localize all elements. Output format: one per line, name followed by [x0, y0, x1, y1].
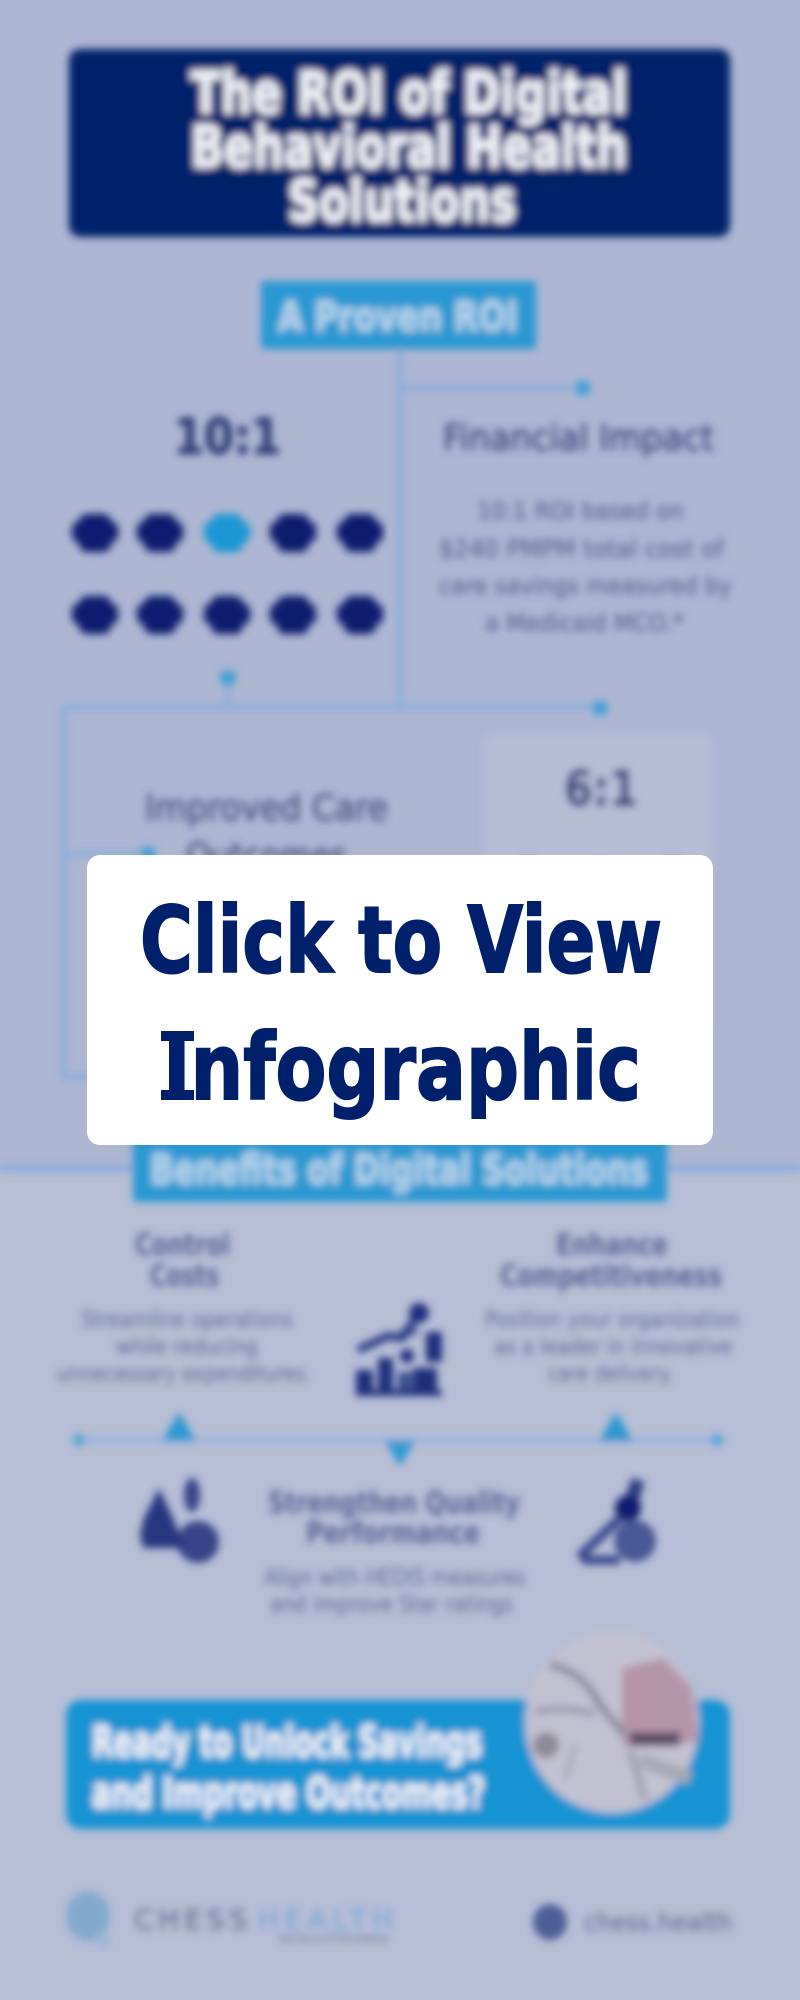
benefit: Enhance Competitiveness: [485, 1228, 740, 1387]
text: financial impact description: [439, 497, 732, 637]
benefit: Enhance Competitiveness: care delivery.: [548, 1362, 673, 1387]
section heading: A Proven ROI: A Proven ROI: [278, 292, 518, 341]
icon: competitive edge: [582, 1480, 656, 1562]
heading: Improved Care Outcomes: Outcomes: [186, 836, 347, 877]
text: quality description: [264, 1565, 525, 1618]
title banner: [69, 49, 730, 237]
background: upper section: [0, 0, 800, 1170]
benefit: Control Costs: [57, 1228, 311, 1387]
call to action banner: Ready to Unlock Savings: [92, 1717, 482, 1768]
logo: Chess Health: HEALTH: [258, 1903, 393, 1936]
icon: rising bar chart: [356, 1303, 442, 1396]
section heading: A Proven ROI: [261, 281, 536, 349]
benefit: Enhance Competitiveness: Competitiveness: [500, 1259, 722, 1294]
logo: Chess Health: SOLUTIONS: [278, 1934, 388, 1945]
title banner: The ROI of Digital: [191, 59, 627, 127]
benefit: Enhance Competitiveness: as a leader in innovative: [494, 1335, 732, 1360]
icon: coins and drop (cost control): [140, 1478, 219, 1563]
piggy bank pictogram: 10 of 10: [72, 514, 383, 634]
heading: Strengthen Quality Performance: [268, 1486, 520, 1551]
title banner: Behavioral Health: [191, 113, 627, 181]
photo circle: hand with stethoscope: [525, 1633, 699, 1813]
text: quality description: and improve Star ratings: [270, 1592, 513, 1618]
logo: Chess Health: [66, 1891, 393, 1948]
heading: Financial Impact: Financial Impact: [443, 418, 714, 459]
timeline with markers: [73, 1412, 723, 1466]
benefit: Control Costs: while reducing: [116, 1335, 258, 1360]
website link: chess.health: [584, 1908, 732, 1938]
heading: Improved Care Outcomes: Improved Care: [145, 788, 388, 829]
title banner: Solutions: [288, 167, 516, 235]
benefit: Enhance Competitiveness: Position your organization: [485, 1308, 740, 1333]
text: financial impact description: 10:1 ROI based on: [477, 497, 684, 525]
benefit: Control Costs: Streamline operations: [81, 1308, 293, 1333]
panel: 6:1 stat card: [485, 734, 712, 1034]
call to action banner: [66, 1700, 730, 1829]
text: financial impact description: a Medicaid MCO.*: [485, 609, 684, 637]
section heading: Benefits of Digital Solutions: Benefits of Digital Solutions: [150, 1145, 648, 1194]
website link: [533, 1904, 732, 1940]
heading: Strengthen Quality Performance: Performance: [306, 1516, 480, 1551]
call to action banner: and Improve Outcomes?: [92, 1768, 485, 1819]
benefit: Control Costs: Control: [135, 1228, 230, 1263]
panel: 6:1 stat card: 6:1: [564, 760, 638, 818]
divider line: [0, 1166, 800, 1172]
benefit: Control Costs: unnecessary expenditures.: [57, 1362, 311, 1387]
text: quality description: Align with HEDIS measures: [264, 1565, 525, 1591]
benefit: Control Costs: Costs: [150, 1259, 219, 1294]
connector lines: top tree: [64, 349, 600, 1077]
section heading: Benefits of Digital Solutions: [133, 1130, 667, 1202]
heading: Improved Care Outcomes: [145, 788, 388, 877]
logo: Chess Health: CHESS: [134, 1903, 247, 1936]
background: lower section: [0, 1170, 800, 2000]
connector nodes: [141, 381, 607, 861]
overlay card: Click to View Infographic: [87, 855, 713, 1145]
overlay card: Click to View Infographic: Infographic: [163, 1014, 641, 1121]
stat: 10:1: 10:1: [174, 408, 281, 466]
heading: Strengthen Quality Performance: Strengthen Quality: [268, 1486, 520, 1521]
overlay card: Click to View Infographic: Click to View: [140, 887, 662, 994]
benefit: Enhance Competitiveness: Enhance: [556, 1228, 668, 1263]
text: financial impact description: $240 PMPM total cost of: [439, 535, 725, 563]
text: financial impact description: care savings measured by: [439, 572, 732, 600]
